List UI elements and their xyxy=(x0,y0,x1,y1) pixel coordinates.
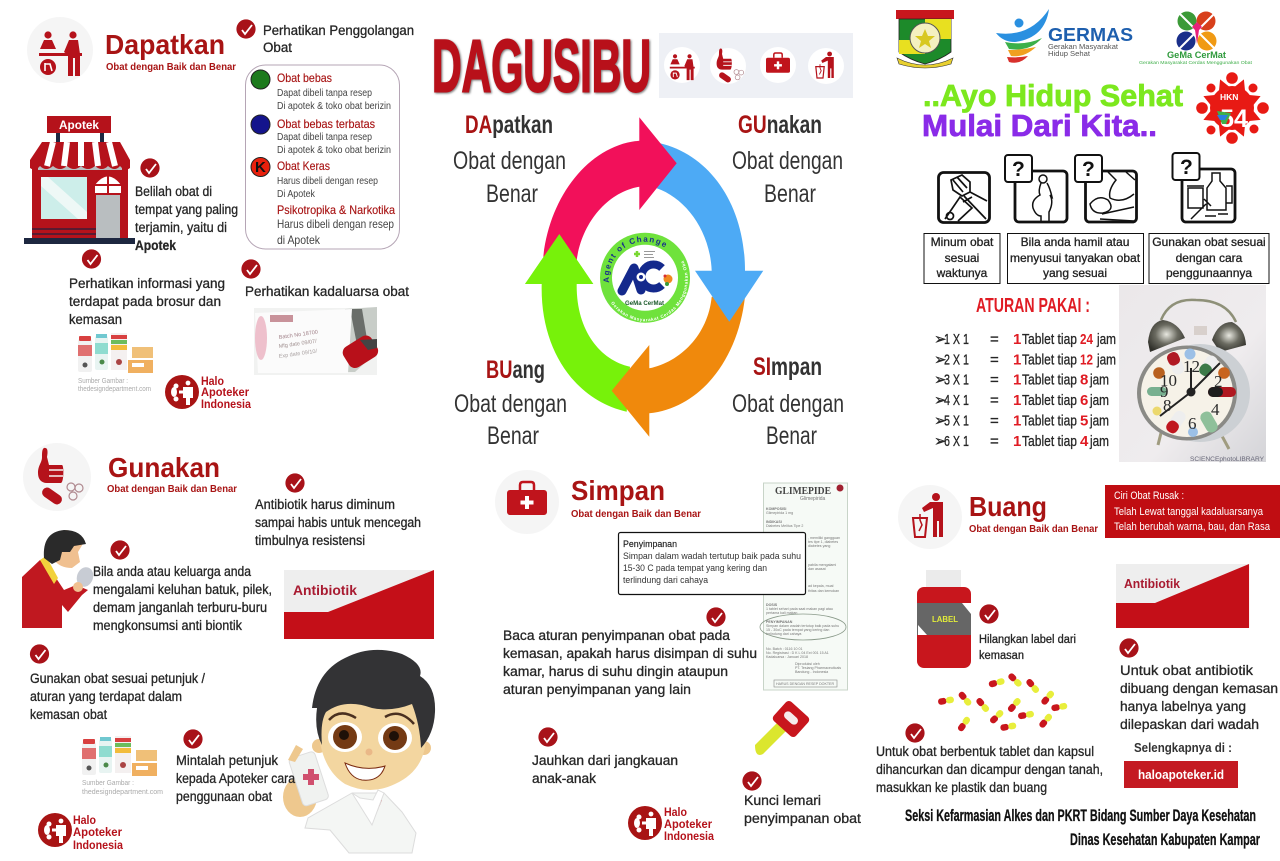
icon: Buang circle xyxy=(898,485,962,549)
panel: golongan obat: Obat bebas terbatas xyxy=(277,117,375,131)
callout: cara penggunaan xyxy=(1149,234,1269,284)
table: aturan pakai: = xyxy=(990,392,999,409)
text: antibiotik dibuang xyxy=(1120,663,1278,732)
panel: golongan obat: Di apotek & toko obat berizin xyxy=(277,145,391,156)
callout: cara penggunaan: Gunakan obat sesuai xyxy=(1152,235,1266,249)
image: leaflet Glimepide: , memiliki gangguan xyxy=(808,536,840,540)
title: DAGUSIBU: DAGUSIBU xyxy=(432,24,651,108)
table: aturan pakai: 1 xyxy=(1013,412,1021,430)
text: tablet dan kapsul: masukkan ke plastik dan buang xyxy=(876,780,1047,795)
logo: Halo Apoteker Indonesia: Halo xyxy=(201,374,224,388)
callout: minum obat: Minum obat xyxy=(931,235,994,249)
heading: Buang: Buang xyxy=(969,491,1047,522)
table: aturan pakai: = xyxy=(990,372,999,388)
icon: check xyxy=(1119,638,1139,658)
logo: Halo Apoteker Indonesia: Indonesia xyxy=(73,838,123,852)
card: Antibiotik: Antibiotik xyxy=(293,582,357,598)
heading: Dapatkan: Obat dengan Baik dan Benar xyxy=(106,61,236,73)
illustration: apoteker xyxy=(283,650,435,853)
text: aturan penyimpanan: aturan penyimpanan yang lain xyxy=(503,682,691,697)
text: antibiotik dibuang: dilepaskan dari wadah xyxy=(1120,717,1259,732)
table: aturan pakai: 24 xyxy=(1080,331,1094,348)
image: leaflet Glimepide: KOMPOSISI xyxy=(766,507,786,511)
icon: key xyxy=(755,699,811,755)
button: haloapoteker.id: haloapoteker.id xyxy=(1138,767,1224,782)
heading: Ayo Hidup Sehat: Mulai Dari Kita.. xyxy=(922,108,1157,143)
text: jangkauan anak: Jauhkan dari jangkauan xyxy=(532,753,678,768)
table: aturan pakai: jam xyxy=(1089,392,1109,409)
logo: Halo Apoteker Indonesia: Indonesia xyxy=(201,397,251,411)
text: kadaluarsa: Perhatikan kadaluarsa obat xyxy=(245,284,409,299)
image: leaflet Glimepide: GLIMEPIDE xyxy=(775,485,831,497)
icon strip xyxy=(659,33,853,98)
table: aturan pakai: 4 X 1 xyxy=(944,392,969,409)
table: aturan pakai xyxy=(934,331,1116,450)
labels: DAGUSIBU cycle xyxy=(453,111,844,450)
table: aturan pakai: 6 X 1 xyxy=(944,433,969,450)
footer: instansi xyxy=(905,806,1260,849)
table: aturan pakai: ➢ xyxy=(934,372,947,388)
image: leaflet Glimepide: 15 - 30oC pada tempat yang kering dan xyxy=(766,628,829,632)
text: antibiotik habis xyxy=(255,497,421,548)
image: leaflet Glimepide: DOSIS xyxy=(766,603,778,607)
icon: check xyxy=(905,723,925,743)
text: petunjuk: Gunakan obat sesuai petunjuk / xyxy=(30,671,205,686)
text: apoteker: kepada Apoteker cara xyxy=(176,771,295,786)
table: aturan pakai: 5 xyxy=(1080,412,1088,430)
logo: Halo Apoteker Indonesia: Apoteker xyxy=(73,825,122,839)
image: leaflet Glimepide: Diabetes Melitus Tipe 2 xyxy=(766,524,803,528)
table: aturan pakai: 1 xyxy=(1013,392,1021,409)
heading: Gunakan: Gunakan xyxy=(108,452,220,483)
text: keluhan: Bila anda atau keluarga anda xyxy=(93,564,251,579)
text: jangkauan anak: anak-anak xyxy=(532,771,596,786)
pictogram: hamil: ? xyxy=(1012,158,1025,181)
table: aturan pakai: ➢ xyxy=(934,433,947,450)
logo: GERMAS: Hidup Sehat xyxy=(1048,51,1090,58)
callout: penyimpanan: Simpan dalam wadah tertutup baik pada suhu xyxy=(623,551,801,561)
panel: golongan obat: di Apotek xyxy=(277,233,321,247)
image: clock with pills: 10 xyxy=(1160,371,1177,390)
table: aturan pakai: = xyxy=(990,433,999,450)
table: aturan pakai: 1 xyxy=(1013,331,1021,348)
heading: Simpan xyxy=(571,475,701,520)
table: aturan pakai: 12 xyxy=(1080,352,1093,368)
text: antibiotik habis: sampai habis untuk mencegah xyxy=(255,515,421,530)
table: aturan pakai: ➢ xyxy=(934,352,947,368)
callout: cara penggunaan: dengan cara xyxy=(1176,251,1243,265)
text: aturan penyimpanan xyxy=(503,628,757,697)
image: leaflet Glimepide: Diproduksi oleh xyxy=(795,662,820,666)
icon: check xyxy=(538,727,558,747)
callout: minum obat: sesuai xyxy=(945,251,979,265)
logo: Halo Apoteker Indonesia xyxy=(165,374,251,411)
labels: DAGUSIBU cycle: Obat dengan xyxy=(732,147,843,175)
illustration: man coughing xyxy=(22,530,96,628)
image: leaflet Glimepide: diabetes yang xyxy=(808,544,830,548)
text: tablet dan kapsul: dihancurkan dan dicampur dengan tanah, xyxy=(876,762,1103,777)
icon: check xyxy=(183,729,203,749)
image: vial kadaluarsa: Batch No 18700 xyxy=(278,330,318,341)
panel: golongan obat: Di Apotek xyxy=(277,189,316,200)
panel: golongan obat: Dapat dibeli tanpa resep xyxy=(277,88,372,99)
icon: apotek store: Apotek xyxy=(59,118,99,132)
table: aturan pakai: Tablet tiap xyxy=(1022,331,1077,348)
logo: HKN xyxy=(1196,72,1269,144)
text: penggolangan xyxy=(263,23,414,55)
logo: GeMa CerMat: GeMa CerMat xyxy=(1167,50,1227,61)
text: petunjuk: kemasan obat xyxy=(30,707,107,722)
card: Antibiotik: Antibiotik xyxy=(1124,576,1181,591)
logo: Agent of Change: Gerakan Masyarakat Cerdas Menggunakan Obat xyxy=(612,260,688,322)
text: antibiotik dibuang: Untuk obat antibiotik xyxy=(1120,663,1253,678)
labels: DAGUSIBU cycle: SImpan xyxy=(753,353,822,381)
table: aturan pakai: jam xyxy=(1096,331,1116,348)
text: belilah obat: tempat yang paling xyxy=(135,202,238,217)
image: leaflet Glimepide: PENYIMPANAN xyxy=(766,620,793,624)
image: leaflet Glimepide: PT. Tesiang Pharmaceuticals xyxy=(795,666,841,670)
callout: minum obat: waktunya xyxy=(936,266,988,280)
text: keluhan xyxy=(93,564,272,633)
text: informasi brosur xyxy=(69,276,225,327)
image: leaflet Glimepide: No. Batch : 0116 10 01 xyxy=(766,647,802,651)
callout: penyimpanan xyxy=(618,532,806,594)
image: clock with pills: SCIENCEphotoLIBRARY xyxy=(1190,456,1265,463)
table: aturan pakai: jam xyxy=(1089,433,1109,450)
text: apoteker: penggunaan obat xyxy=(176,789,272,804)
text: hilangkan label xyxy=(979,634,1076,662)
image: leaflet Glimepide: Bandung - Indonesia xyxy=(795,670,828,674)
image: leaflet Glimepide: INDIKASI xyxy=(766,520,782,524)
text: keluhan: mengkonsumsi anti biontik xyxy=(93,618,242,633)
heading: Dapatkan xyxy=(105,29,236,73)
table: aturan pakai: 6 xyxy=(1080,392,1088,409)
image: kemasan obat: thedesigndepartment.com xyxy=(78,386,151,393)
image: leaflet Glimepide: Glimepirida 1 mg xyxy=(766,511,793,515)
panel: golongan obat: Di apotek & toko obat berizin xyxy=(277,101,391,112)
panel: golongan obat: Obat Keras xyxy=(277,159,330,173)
image: kemasan obat xyxy=(82,736,163,796)
table: aturan pakai: 1 xyxy=(1013,372,1021,388)
image: leaflet Glimepide xyxy=(760,483,848,690)
panel: Gunakan xyxy=(22,443,435,853)
pictogram: minum obat xyxy=(938,172,990,222)
table: aturan pakai: ➢ xyxy=(934,392,947,409)
table: aturan pakai: 1 X 1 xyxy=(944,331,969,348)
icon: check xyxy=(979,604,999,624)
button: haloapoteker.id xyxy=(1124,761,1238,788)
text: belilah obat: Belilah obat di xyxy=(135,184,212,199)
text: keluhan: mengalami keluhan batuk, pilek, xyxy=(93,582,272,597)
image: leaflet Glimepide: Kadaluarsa : Januari 2018 xyxy=(766,655,808,659)
table: aturan pakai: = xyxy=(990,352,999,368)
text: aturan penyimpanan: Baca aturan penyimpanan obat pada xyxy=(503,628,731,643)
table: aturan pakai: 1 xyxy=(1013,352,1021,368)
text: hilangkan label: Hilangkan label dari xyxy=(979,634,1076,646)
card: Antibiotik xyxy=(284,570,434,639)
pictogram: menyusui: ? xyxy=(1082,158,1095,181)
logo: crest xyxy=(896,10,954,68)
logo: Agent of Change xyxy=(600,232,690,323)
logo: Halo Apoteker Indonesia: Apoteker xyxy=(201,385,249,399)
panel: golongan obat: Obat bebas xyxy=(277,71,332,85)
icon: Simpan circle xyxy=(495,470,559,534)
text: keluhan: demam janganlah terburu-buru xyxy=(93,600,267,615)
callout: cara penggunaan: penggunaannya xyxy=(1166,266,1252,280)
panel: Simpan xyxy=(495,470,861,843)
labels: DAGUSIBU cycle: GUnakan xyxy=(738,111,822,139)
chart: cycle arrows xyxy=(525,117,763,437)
icon: check xyxy=(110,540,130,560)
labels: DAGUSIBU cycle: BUang xyxy=(486,356,545,384)
image: leaflet Glimepide: dan asasat xyxy=(808,567,826,571)
logo: GeMa CerMat: Gerakan Masyarakat Cerdas Menggunakan Obat xyxy=(1139,60,1253,65)
image: leaflet Glimepide: thitas dan kemokan xyxy=(808,589,839,593)
callout: hamil atau menyusui: menyusui tanyakan obat xyxy=(1010,251,1141,265)
callout: penyimpanan: 15-30 C pada tempat yang kering dan xyxy=(623,563,767,573)
heading: Dapatkan: Dapatkan xyxy=(105,29,225,60)
card: Antibiotik xyxy=(1116,564,1249,628)
callout: hamil atau menyusui: Bila anda hamil atau xyxy=(1021,235,1129,249)
panel: golongan obat: K xyxy=(255,159,266,176)
table: aturan pakai: 4 xyxy=(1080,433,1089,450)
table: aturan pakai: 5 X 1 xyxy=(944,412,969,430)
heading: aturan pakai: ATURAN PAKAI : xyxy=(976,295,1090,317)
callout: hamil atau menyusui xyxy=(1008,234,1144,284)
logo: Agent of Change: Agent of Change xyxy=(604,236,666,282)
heading: Ayo Hidup Sehat xyxy=(922,78,1183,143)
panel: golongan obat xyxy=(246,65,400,249)
text: informasi brosur: terdapat pada brosur dan xyxy=(69,294,221,309)
text: belilah obat: terjamin, yaitu di xyxy=(135,220,227,235)
panel: Buang xyxy=(876,485,1280,795)
logo: HKN: HKN xyxy=(1220,92,1238,102)
image: leaflet Glimepide: Simpan dalam wadah tertutup baik pada suhu xyxy=(766,624,839,628)
table: aturan pakai: Tablet tiap xyxy=(1022,433,1077,450)
text: penggolangan: Perhatikan Penggolangan xyxy=(263,23,414,38)
pictogram: menyusui xyxy=(1075,155,1136,222)
icon: check xyxy=(241,259,261,279)
text: informasi brosur: kemasan xyxy=(69,312,122,327)
icon: check xyxy=(236,19,256,39)
text: penggolangan: Obat xyxy=(263,40,292,55)
labels: DAGUSIBU cycle: Benar xyxy=(766,422,817,450)
panel: Dapatkan xyxy=(24,17,414,411)
callout: penyimpanan: Penyimpanan xyxy=(623,539,677,549)
callout: penyimpanan: terlindung dari cahaya xyxy=(623,575,708,585)
icon: check xyxy=(285,473,305,493)
table: aturan pakai: Tablet tiap xyxy=(1022,372,1077,388)
table: aturan pakai: Tablet tiap xyxy=(1022,352,1077,368)
icon: apotek store xyxy=(24,116,135,244)
logo: Halo Apoteker Indonesia: Halo xyxy=(664,805,687,819)
callout: ciri obat rusak xyxy=(1105,485,1280,538)
logo: Halo Apoteker Indonesia: Halo xyxy=(73,813,96,827)
image: vial kadaluarsa xyxy=(254,307,381,375)
heading: Gunakan: Obat dengan Baik dan Benar xyxy=(107,483,237,495)
labels: DAGUSIBU cycle: Benar xyxy=(764,180,816,208)
pictogram: hamil xyxy=(1005,155,1067,222)
image: clock with pills: 2 xyxy=(1214,372,1222,391)
logo: Halo Apoteker Indonesia xyxy=(628,805,714,843)
pictogram: obat xyxy=(1172,153,1235,222)
heading: Ayo Hidup Sehat: ..Ayo Hidup Sehat xyxy=(923,78,1183,113)
logo: GERMAS: Gerakan Masyarakat xyxy=(1048,44,1118,51)
icon: Dapatkan circle xyxy=(27,17,93,83)
heading: Simpan: Simpan xyxy=(571,475,665,506)
table: aturan pakai: = xyxy=(990,331,999,348)
heading: Simpan: Obat dengan Baik dan Benar xyxy=(571,508,701,520)
table: aturan pakai: 3 X 1 xyxy=(944,372,969,388)
text: aturan penyimpanan: kemasan, apakah harus disimpan di suhu xyxy=(503,646,757,661)
table: aturan pakai: jam xyxy=(1089,412,1109,430)
image: leaflet Glimepide: 1 tablet sehari pada saat makan pagi atau xyxy=(766,607,833,611)
text: antibiotik dibuang: hanya labelnya yang xyxy=(1120,699,1246,714)
table: aturan pakai: jam xyxy=(1096,352,1116,368)
icon: check xyxy=(742,771,762,791)
icon: bottle with label xyxy=(917,570,971,668)
table: aturan pakai: = xyxy=(990,412,999,430)
text: hilangkan label: kemasan xyxy=(979,650,1024,662)
panel: golongan obat: Harus dibeli dengan resep xyxy=(277,217,394,231)
icon: check xyxy=(82,249,101,269)
icon: check xyxy=(706,607,726,627)
logo: GERMAS: GERMAS xyxy=(1048,25,1133,45)
panel: golongan obat: Dapat dibeli tanpa resep xyxy=(277,132,372,143)
table: aturan pakai: Tablet tiap xyxy=(1022,392,1077,409)
panel: golongan obat: Psikotropika & Narkotika xyxy=(277,203,395,217)
labels: DAGUSIBU cycle: Benar xyxy=(487,422,539,450)
labels: DAGUSIBU cycle: DApatkan xyxy=(465,111,553,139)
image: kemasan obat: Sumber Gambar : xyxy=(82,780,134,787)
text: antibiotik dibuang: dibuang dengan kemasan xyxy=(1120,681,1278,696)
text: jangkauan anak xyxy=(532,753,678,786)
image: leaflet Glimepide: pabila mengalami xyxy=(808,563,836,567)
icon: Gunakan circle xyxy=(23,443,91,511)
labels: DAGUSIBU cycle: Obat dengan xyxy=(453,147,566,175)
heading: Buang: Obat dengan Baik dan Benar xyxy=(969,523,1098,535)
image: leaflet Glimepide: No. Registrasi : D K L 04 Ext 001 15 A1 xyxy=(766,651,829,655)
image: kemasan obat: thedesigndepartment.com xyxy=(82,789,163,796)
image: leaflet Glimepide: pertama kali makan xyxy=(766,611,797,615)
image: clock with pills: 4 xyxy=(1211,400,1220,419)
labels: DAGUSIBU cycle: Benar xyxy=(486,180,538,208)
text: tablet dan kapsul xyxy=(876,744,1103,795)
image: clock with pills: 8 xyxy=(1163,396,1172,415)
logo: Halo Apoteker Indonesia xyxy=(38,813,123,852)
pictogram: obat: ? xyxy=(1180,156,1193,179)
text: antibiotik habis: timbulnya resistensi xyxy=(255,533,365,548)
image: vial kadaluarsa: Exp date 09/10/ xyxy=(278,349,318,360)
callout: minum obat xyxy=(924,234,1000,284)
table: aturan pakai: ➢ xyxy=(934,412,947,430)
image: leaflet Glimepide: Glimepirida xyxy=(800,496,826,502)
heading: Gunakan xyxy=(107,452,237,495)
table: aturan pakai: 1 xyxy=(1013,433,1021,450)
icon: check xyxy=(30,644,49,664)
labels: DAGUSIBU cycle: Obat dengan xyxy=(732,390,844,418)
text: informasi brosur: Perhatikan informasi yang xyxy=(69,276,225,291)
table: aturan pakai: 8 xyxy=(1080,372,1088,388)
image: clock with pills: 9 xyxy=(1160,382,1168,401)
text: aturan penyimpanan: kamar, harus di suhu dingin ataupun xyxy=(503,664,728,679)
table: aturan pakai: ➢ xyxy=(934,331,947,348)
image: kemasan obat: Sumber Gambar : xyxy=(78,378,128,385)
image: leaflet Glimepide: HARUS DENGAN RESEP DOKTER xyxy=(776,682,834,686)
table: aturan pakai: 2 X 1 xyxy=(944,352,969,368)
logo: HKN: 54 xyxy=(1220,105,1248,133)
image: leaflet Glimepide: tes tipe 1, diabetes xyxy=(808,540,838,544)
logo: GERMAS xyxy=(996,9,1133,63)
text: tablet dan kapsul: Untuk obat berbentuk tablet dan kapsul xyxy=(876,744,1094,759)
text: apoteker xyxy=(176,753,295,804)
text: kunci lemari: penyimpanan obat xyxy=(744,811,861,826)
text: kunci lemari: Kunci lemari xyxy=(744,793,821,808)
image: leaflet Glimepide: terlindung dari cahaya xyxy=(766,632,801,636)
callout: hamil atau menyusui: yang sesuai xyxy=(1043,266,1107,280)
text: petunjuk: aturan yang terdapat dalam xyxy=(30,689,182,704)
text: belilah obat xyxy=(135,184,238,253)
table: aturan pakai: Tablet tiap xyxy=(1022,412,1077,430)
callout: ciri obat rusak: Ciri Obat Rusak : xyxy=(1114,490,1184,502)
image: kemasan obat xyxy=(78,333,153,393)
text: apoteker: Mintalah petunjuk xyxy=(176,753,278,768)
text: kunci lemari xyxy=(744,793,861,826)
image: vial kadaluarsa: Mfg date 09/07/ xyxy=(278,339,318,350)
icon: check xyxy=(140,158,160,178)
icon: bottle with label: LABEL xyxy=(932,615,958,624)
image: leaflet Glimepide: ad kepala, mual xyxy=(808,584,834,588)
panel: golongan obat: Harus dibeli dengan resep xyxy=(277,176,378,187)
logo: Halo Apoteker Indonesia: Indonesia xyxy=(664,829,714,843)
image: clock with pills xyxy=(1119,285,1266,463)
text: selengkapnya: Selengkapnya di : xyxy=(1134,740,1232,755)
table: aturan pakai: jam xyxy=(1089,372,1109,388)
labels: DAGUSIBU cycle: Obat dengan xyxy=(454,390,567,418)
logo: Halo Apoteker Indonesia: Apoteker xyxy=(664,817,712,831)
logo: Agent of Change: GeMa CerMat xyxy=(625,301,664,307)
image: clock with pills: 12 xyxy=(1183,357,1200,376)
heading: Buang xyxy=(969,491,1098,535)
text: antibiotik habis: Antibiotik harus diminum xyxy=(255,497,395,512)
text: petunjuk xyxy=(30,671,205,722)
image: clock with pills: 6 xyxy=(1188,414,1196,433)
text: belilah obat: Apotek xyxy=(135,238,176,253)
icon: scattered capsules xyxy=(938,672,1068,732)
logo: GeMa CerMat xyxy=(1139,12,1253,65)
